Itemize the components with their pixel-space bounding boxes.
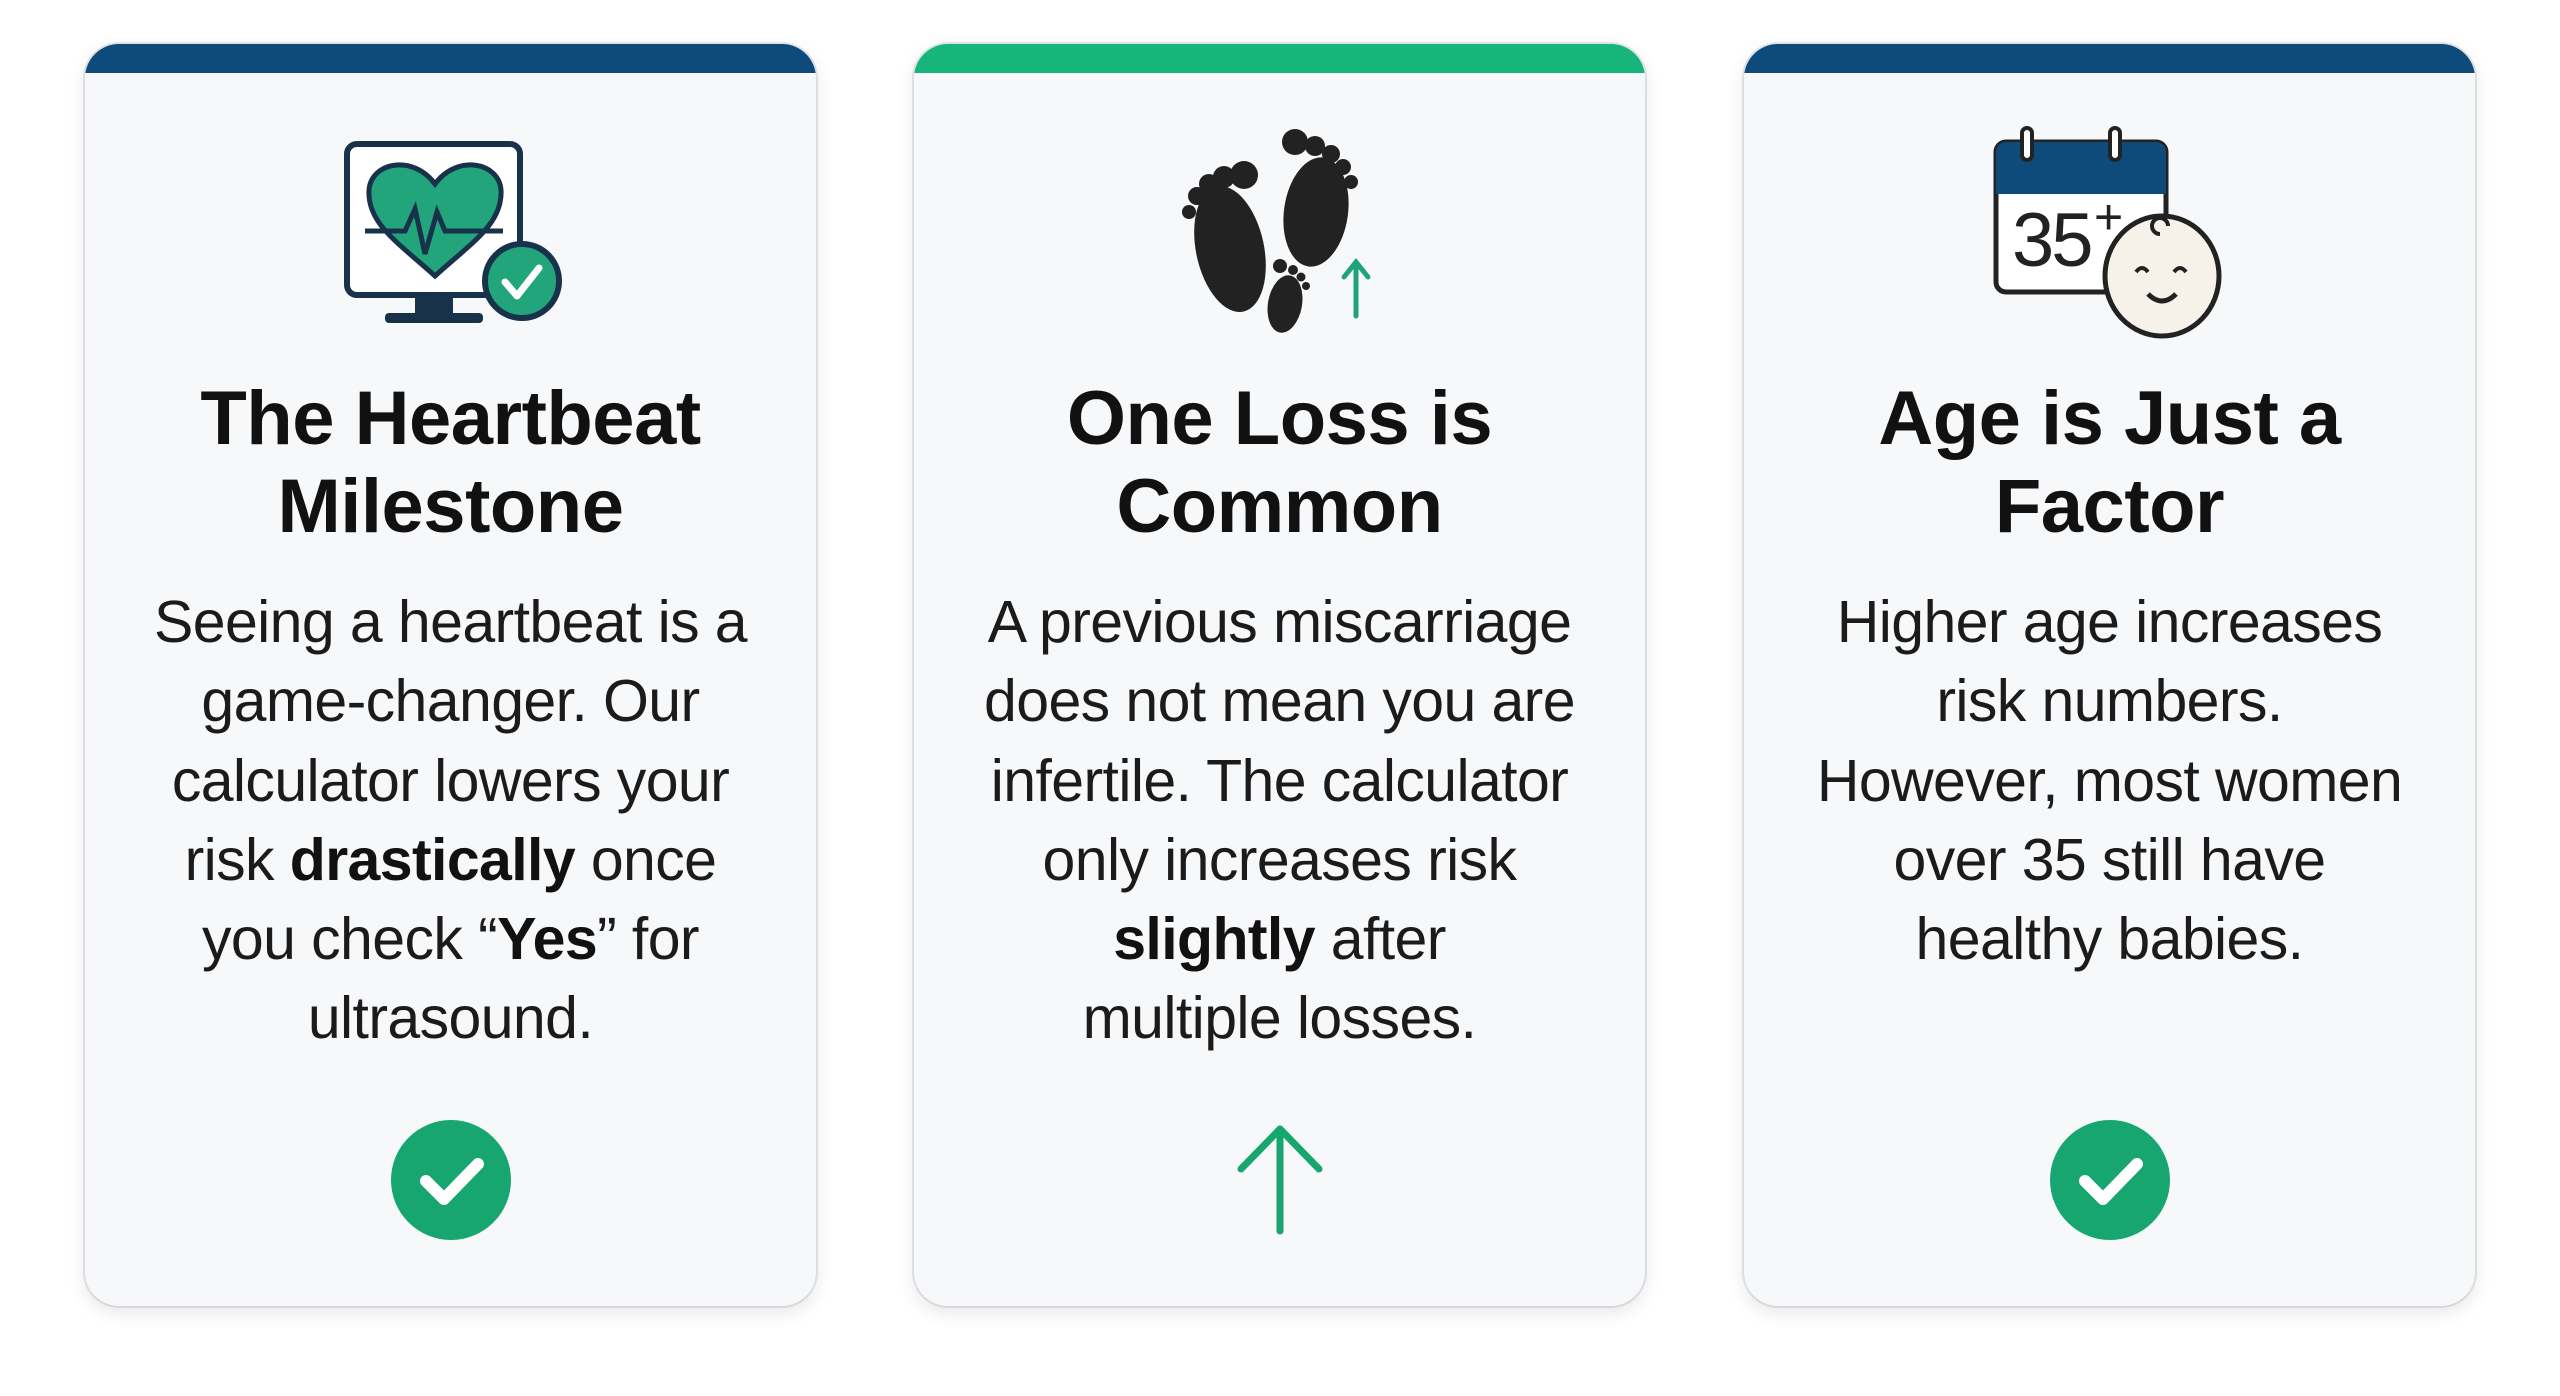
top bar navy — [85, 44, 816, 73]
body text: calculator lowers your — [172, 748, 729, 814]
icon: footprints with arrow — [1182, 129, 1370, 333]
icon: check badge — [391, 1120, 511, 1240]
title: One Loss is — [1067, 376, 1492, 461]
body text: risk drastically once — [185, 827, 716, 893]
title — [1878, 376, 2342, 549]
body text: healthy babies. — [1916, 906, 2303, 972]
body text — [984, 589, 1575, 1051]
top bar green — [914, 44, 1645, 73]
body text: you check “Yes” for — [202, 906, 699, 972]
body text: However, most women — [1817, 748, 2402, 814]
body text: Higher age increases — [1837, 589, 2382, 655]
panel: one loss is common — [914, 44, 1645, 1306]
body text: A previous miscarriage — [988, 589, 1571, 655]
title: Common — [1116, 464, 1443, 549]
title: Age is Just a — [1878, 376, 2341, 461]
body text — [154, 589, 748, 1051]
body text: risk numbers. — [1936, 668, 2283, 734]
title: Factor — [1995, 464, 2224, 549]
icon: calendar 35+ with baby — [1994, 126, 2222, 338]
body text: infertile. The calculator — [991, 748, 1568, 814]
icon: up arrow — [1238, 1126, 1322, 1234]
body text: does not mean you are — [984, 668, 1575, 734]
title: Milestone — [278, 464, 624, 549]
icon: calendar 35+ with baby: + — [2094, 189, 2123, 245]
title — [1067, 376, 1492, 549]
body text: multiple losses. — [1083, 985, 1476, 1051]
body text — [1817, 589, 2402, 972]
icon: monitor with heart and check — [344, 141, 562, 323]
body text: Seeing a heartbeat is a — [154, 589, 747, 655]
panel: age is just a factor — [1744, 44, 2475, 1306]
body text: over 35 still have — [1894, 827, 2325, 893]
panel: heartbeat milestone — [85, 44, 816, 1306]
top bar navy — [1744, 44, 2475, 73]
body text: ultrasound. — [308, 985, 593, 1051]
title: The Heartbeat — [200, 376, 701, 461]
icon: calendar 35+ with baby: 35 — [2012, 198, 2091, 283]
title — [200, 376, 701, 549]
body text: only increases risk — [1043, 827, 1516, 893]
body text: slightly after — [1113, 906, 1446, 972]
icon: check badge — [2050, 1120, 2170, 1240]
body text: game-changer. Our — [201, 668, 700, 734]
